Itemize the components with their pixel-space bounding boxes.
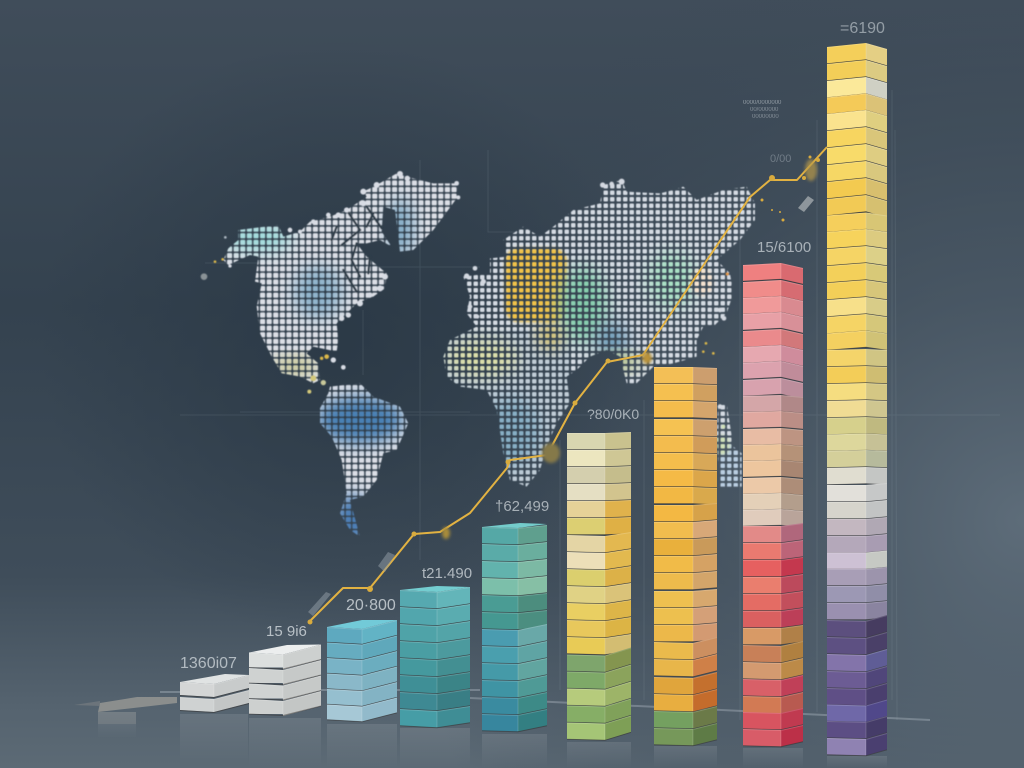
bar 2: white: [249, 644, 321, 716]
small annotation near line: 0/00: [770, 153, 791, 165]
value labels: [180, 20, 885, 672]
bar 8: red, pink and tan: [743, 263, 803, 747]
small annotation: 0000/0000000: [743, 100, 782, 106]
flat base plate at far left: [74, 697, 177, 724]
label bar 7: ?80/0K0: [587, 406, 639, 422]
bar 6: cream, yellow and green: [567, 432, 631, 740]
label bar 4: 20·800: [346, 597, 396, 614]
scattered coastline blobs in Eurasia: [464, 179, 732, 429]
label bar 9: =6190: [840, 20, 885, 37]
label bar 8: 15/6100: [757, 239, 811, 256]
bar 3: blue: [327, 620, 397, 722]
label bar 3: 15 9i6: [266, 623, 307, 640]
data tags along line: [308, 196, 814, 616]
world map: Americas: [200, 170, 461, 536]
carved gaps in northern Canada: [332, 207, 382, 292]
faint guide lines behind map: [180, 90, 1000, 720]
label bar 6: †62,499: [495, 498, 549, 515]
scattered coastline blobs in Americas: [201, 171, 460, 394]
label bar 5: t21.490: [422, 565, 472, 582]
world map: Eurasia, Africa and Australia: [442, 178, 756, 488]
bar 1: white: [180, 674, 249, 712]
small annotation line 3: 00000000: [752, 114, 779, 120]
bar 5: teal green: [482, 523, 547, 732]
floor line and reflections: [98, 690, 930, 768]
bar 7: orange: [654, 367, 717, 746]
americas land colour: [223, 173, 458, 536]
small annotation line 2: 00/000000: [750, 107, 779, 113]
line nodes and sparkle clusters: [308, 156, 820, 624]
label bar 2: 1360i07: [180, 655, 237, 672]
eurasia land colour: [442, 180, 756, 488]
bar 4: teal: [400, 586, 470, 728]
bar 9: tallest yellow, grey and purple: [827, 43, 887, 756]
gold trend line: [308, 147, 827, 624]
